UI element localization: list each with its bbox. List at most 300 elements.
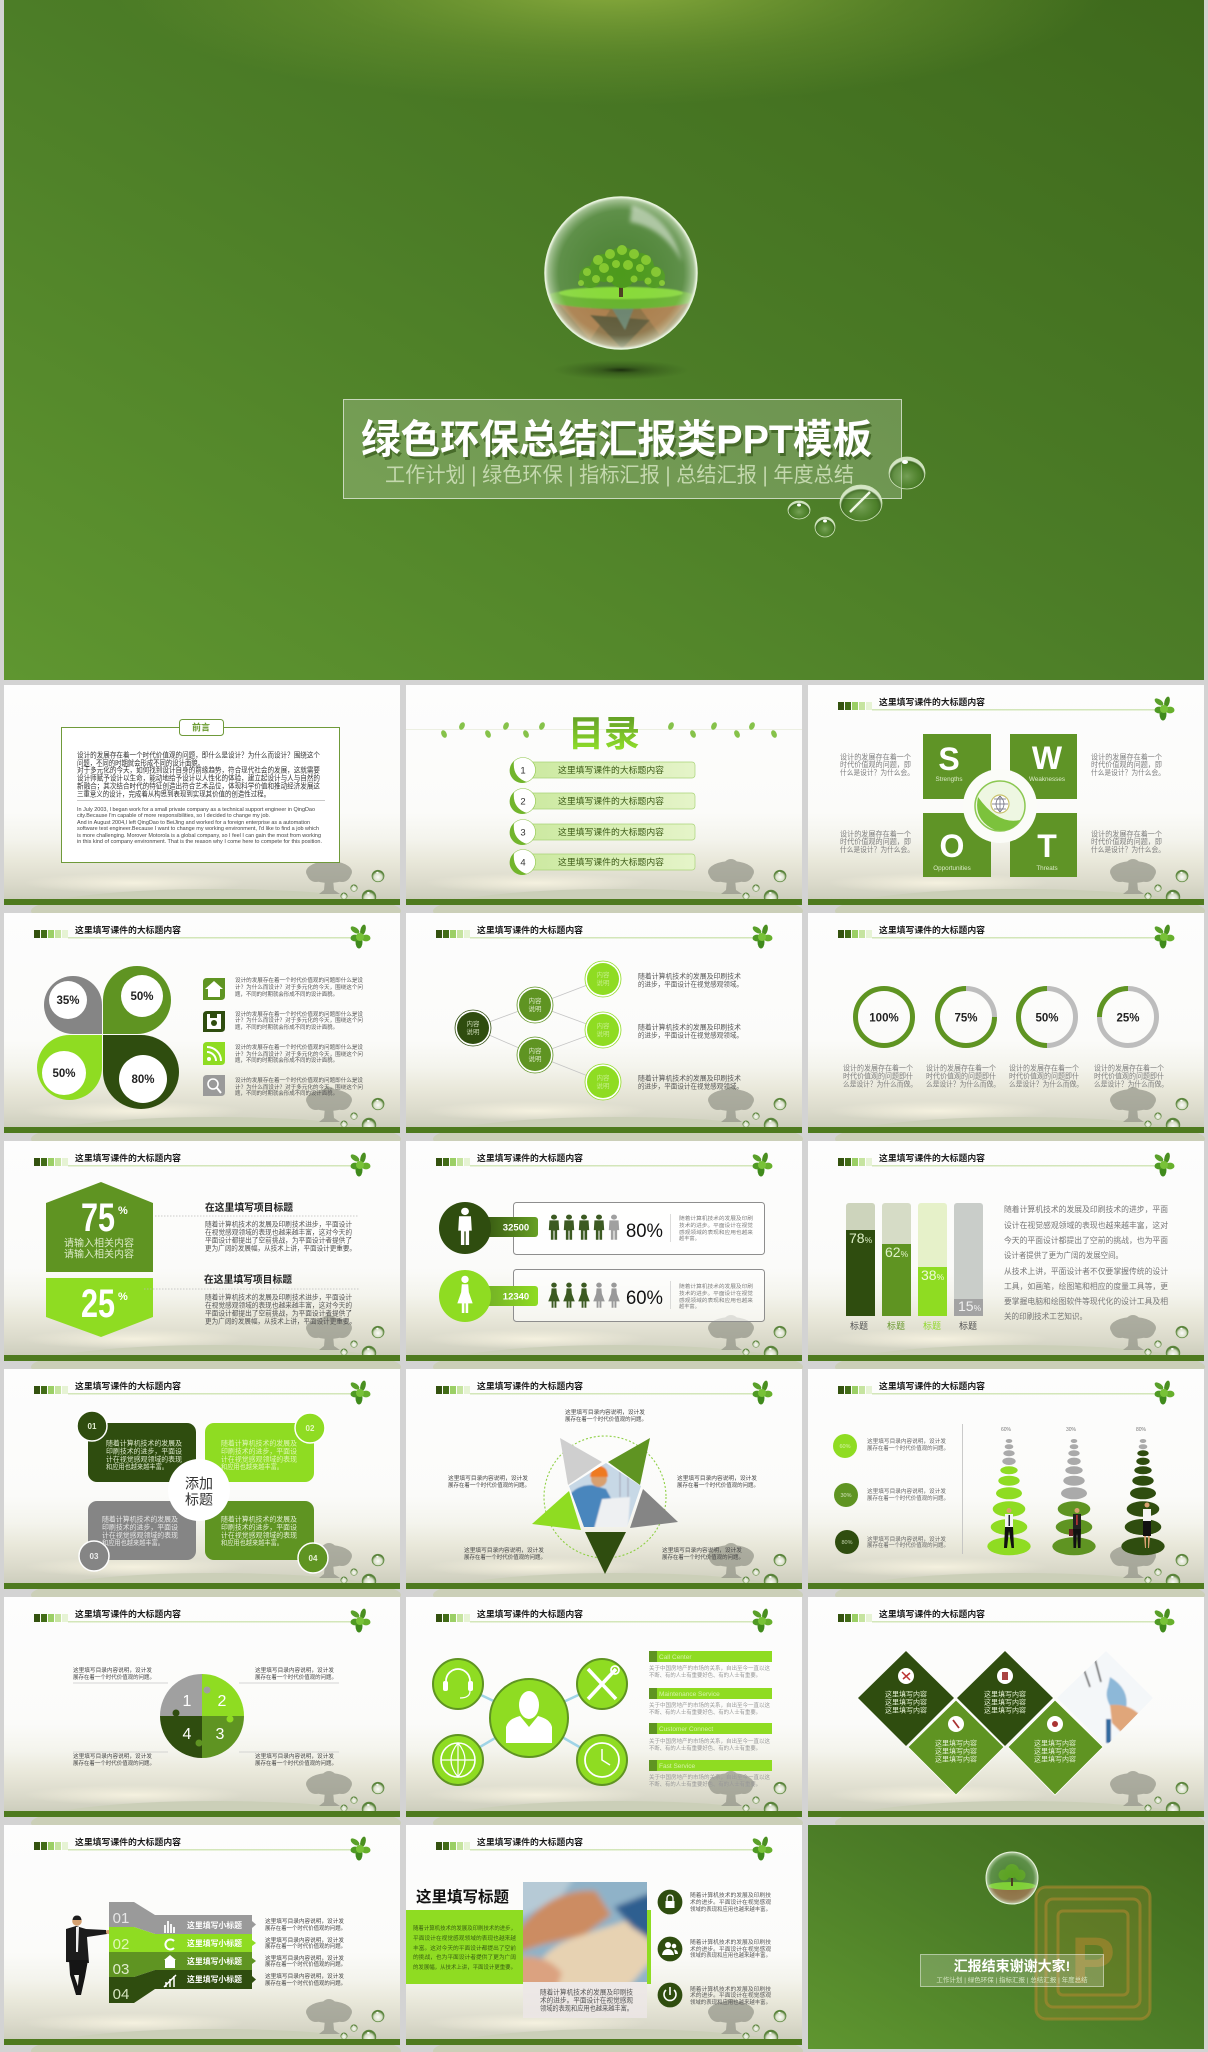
green text panel: 随着计算机技术的发展及印刷技术的进步，	[413, 1924, 516, 1932]
feature: users: 随着计算机技术的发展及印刷技	[690, 1938, 771, 1946]
text blocks: 这里填写目录内容说明，设计发	[73, 1752, 152, 1760]
text block: 随着计算机技术的发展及印刷技术的进步，平面	[1004, 1204, 1168, 1214]
node: third level: 内容	[596, 1021, 610, 1030]
service: Call Center: 关于中国房地产的市场的关系，自出至今一直以这	[649, 1664, 770, 1672]
node: third level: 说明	[596, 978, 610, 987]
heading: main title shadow: 绿色环保总结汇报类PPT模板	[363, 421, 874, 465]
section title: 这里填写标题	[416, 1887, 510, 1906]
text block: Chinese preface: 问题，不同的时期就会形成不同的设计面貌。	[77, 759, 204, 768]
puzzle chart: 4	[183, 1726, 192, 1743]
card 03: 随着计算机技术的发展及	[102, 1514, 178, 1524]
panel: slide stacked ellipses	[808, 1369, 1205, 1617]
legend: 这里填写目录内容说明，设计发	[867, 1487, 946, 1495]
item 1: 在这里填写项目标题	[205, 1201, 293, 1214]
text block: Chinese preface	[77, 751, 321, 799]
heading: 这里填写课件的大标题内容	[477, 1836, 583, 1847]
panel: slide preface	[4, 685, 401, 933]
text: SWOT notes: 什么是设计？为什么会。	[1091, 845, 1165, 854]
shadow under bubble	[553, 360, 689, 380]
ribbon menu: 03	[113, 1961, 129, 1978]
text block: English preface: And in August 2004,I left QingDao to BeiJing and worked for a foreign enterprise as a automation	[77, 820, 310, 826]
card 03: 印刷技术的进步，平面设	[102, 1522, 178, 1532]
service: Call Center	[649, 1651, 772, 1679]
SWOT squares: T	[1037, 828, 1057, 864]
diamond 4	[1008, 1700, 1103, 1795]
card 02: 02	[306, 1424, 315, 1433]
chart: four petals: 50%	[52, 1068, 76, 1080]
text block: Chinese preface: 三重意义的设计，完成着从构思到表现到实现其价值的创造性过程。	[77, 790, 270, 799]
heading: 这里填写课件的大标题内容	[75, 1836, 181, 1847]
feature: lock: 随着计算机技术的发展及印刷技	[690, 1891, 771, 1899]
chart: four petals: 35%	[56, 995, 80, 1007]
card 01	[77, 1411, 196, 1482]
heading: 这里填写课件的大标题内容	[879, 924, 985, 935]
text block: 要掌握电脑和绘图软件等现代化的设计工具及相	[1004, 1296, 1168, 1306]
card 04: 和应用也越来越丰富。	[221, 1538, 283, 1547]
text blocks	[448, 1408, 759, 1561]
text blocks: 随着计算机技术的发展及印刷技术	[638, 1074, 741, 1082]
ring chart 50%: 50%	[1035, 1012, 1059, 1024]
centre label: 标题	[185, 1492, 213, 1508]
icon: search	[203, 1075, 225, 1096]
ribbon menu: 04	[113, 1986, 129, 2003]
heading tag: preface: 前言	[192, 722, 210, 732]
feature: users: 术的进步。平面设计在视觉感观	[690, 1945, 771, 1953]
text: SWOT notes: 设计的发展存在着一个	[840, 752, 911, 762]
captions: 时代价值观的问题即什	[843, 1072, 913, 1080]
text block: English preface: In July 2003, I began work for a small private company as a technical support engineer in QingDao	[77, 807, 315, 813]
text: SWOT notes: 时代价值观的问题，即	[1091, 760, 1162, 769]
text blocks: 展存在着一个时代价值观的问题。	[448, 1481, 530, 1489]
heading: 这里填写课件的大标题内容	[477, 1152, 583, 1163]
text blocks: 这里填写目录内容说明，设计发	[265, 1954, 344, 1962]
item 2	[144, 1273, 359, 1326]
icon: disk	[203, 1011, 225, 1032]
panel: slide service icons	[406, 1597, 803, 1845]
text blocks	[235, 976, 363, 1097]
legend: 展存在着一个时代价值观的问题。	[867, 1541, 949, 1549]
text block: 从技术上讲，平面设计者不仅要掌握传统的设计	[1004, 1266, 1168, 1276]
text blocks: 展存在着一个时代价值观的问题。	[265, 1942, 346, 1950]
node: second level: 内容	[528, 996, 542, 1005]
diamond 1: 这里填写内容	[885, 1698, 927, 1706]
SWOT squares: W	[1032, 740, 1063, 776]
service: Maintenance Service: 关于中国房地产的市场的关系，自出至今一直以这	[649, 1701, 770, 1709]
card 04: 印刷技术的进步，平面设	[221, 1522, 297, 1532]
text blocks: 题，不同的时期就会形成不同的设计面貌。	[235, 1023, 338, 1031]
shape: 75 percent hexagon	[46, 1182, 153, 1272]
shape: 75 percent hexagon: %	[118, 1205, 128, 1217]
ring chart 75%	[938, 988, 994, 1046]
heading tag: preface	[180, 720, 224, 736]
text block: English preface: city.Because I'm capable of more responsibilities, so I decided to change my job.	[77, 813, 270, 819]
diamond 2: 这里填写内容	[984, 1706, 1026, 1714]
captions: 时代价值观的问题即什	[1094, 1072, 1164, 1080]
photo: hands and paper	[523, 1882, 647, 1982]
stack 60%	[987, 1427, 1031, 1555]
panel: closing slide	[808, 1825, 1204, 2049]
green text panel: 丰富。这对今天的平面设计都提出了空前	[413, 1944, 516, 1952]
text block: Chinese preface: 新融合；其次结合时代的特征创造出符合艺术品位，体现科学价值和推动经济发展这	[77, 782, 321, 791]
stack 30%	[1052, 1427, 1096, 1555]
captions: 设计的发展存在着一个	[1009, 1064, 1080, 1072]
heading: 这里填写课件的大标题内容	[879, 1380, 985, 1391]
text blocks: 计？为什么而设计？对于多元化的今天，围绕这个问	[235, 1050, 363, 1058]
panel: slide photo and feature list	[406, 1825, 803, 2052]
bar chart: 38%	[921, 1267, 945, 1283]
green text panel: 平面设计在视觉感观领域的表现也越来越	[413, 1934, 516, 1942]
stat row: male 32500	[439, 1202, 764, 1254]
stat row: male 32500: 越丰富。	[679, 1234, 700, 1242]
captions: 设计的发展存在着一个	[1094, 1064, 1165, 1072]
list item 2	[510, 788, 695, 814]
title box	[920, 1954, 1104, 1986]
legend: 展存在着一个时代价值观的问题。	[867, 1444, 949, 1452]
service: Customer Connect: 关于中国房地产的市场的关系，自出至今一直以这	[649, 1737, 770, 1745]
title box: 工作计划 | 绿色环保 | 指标汇报 | 总结汇报 | 年度总结	[936, 1975, 1088, 1984]
text blocks: 设计的发展存在着一个时代价值观的问题即什么是设	[235, 1043, 363, 1051]
text block: 设计者提供了更为广阔的发展空间。	[1004, 1250, 1123, 1260]
heading: 这里填写课件的大标题内容	[75, 1608, 181, 1619]
stat row: female 12340: 随着计算机技术的发展及印刷	[679, 1282, 753, 1290]
dashed cycle	[544, 1436, 666, 1558]
text blocks: 这里填写目录内容说明，设计发	[265, 1972, 344, 1980]
icon: centre globe	[963, 769, 1037, 843]
diamond 2	[957, 1651, 1053, 1746]
heading: 这里填写课件的大标题内容	[75, 1380, 181, 1391]
bar chart	[846, 1203, 983, 1331]
stack 80%: 80%	[1136, 1427, 1147, 1433]
ring chart 25%	[1100, 988, 1156, 1046]
stat row: female 12340	[439, 1270, 764, 1322]
heading: 这里填写课件的大标题内容	[477, 1380, 583, 1391]
diamond 3: 这里填写内容	[935, 1738, 977, 1748]
diamond 4: 这里填写内容	[1034, 1754, 1076, 1764]
text block: 今天的平面设计都提出了空前的挑战，也为平面	[1004, 1235, 1168, 1245]
heading: contents title: 目录	[568, 713, 640, 754]
figure: businessman suit	[1069, 1508, 1081, 1548]
panel: slide hexagon percentages	[4, 1141, 401, 1389]
legend: 60%	[839, 1444, 851, 1450]
text block: English preface: is more challenging. Morover Motorola is a global company, so I feel I can gain the most from working	[77, 833, 321, 839]
service: Fast Service: Fast Service	[659, 1763, 696, 1770]
heading: 这里填写课件的大标题内容	[879, 1152, 985, 1163]
icon: glass bubble with tree	[545, 197, 697, 350]
puzzle chart: 2	[218, 1693, 227, 1710]
text blocks: 展存在着一个时代价值观的问题。	[464, 1553, 546, 1561]
list item 1: 这里填写课件的大标题内容	[558, 764, 664, 775]
text frame	[62, 728, 340, 862]
ribbon menu: 这里填写小标题	[187, 1956, 242, 1966]
list item 3	[510, 820, 695, 845]
shape: 75 percent hexagon: 请输入相关内容	[64, 1236, 134, 1250]
connector lines	[473, 979, 603, 1082]
icon: globe	[433, 1735, 483, 1785]
card 01: 随着计算机技术的发展及	[106, 1438, 182, 1448]
title box	[344, 400, 902, 498]
diamond 4: 这里填写内容	[1034, 1746, 1076, 1756]
stat row: female 12340: 越丰富。	[679, 1302, 700, 1310]
text blocks	[638, 972, 743, 1090]
connectors	[458, 1684, 602, 1760]
figure: businessman	[66, 1916, 110, 1995]
list item 1	[510, 758, 695, 783]
bar chart: 标题	[850, 1320, 868, 1331]
text blocks: 题，不同的时期就会形成不同的设计面貌。	[235, 1089, 338, 1097]
green text panel: 的发展幅，从技术上讲，平面设计更重要。	[413, 1963, 516, 1971]
text block: Chinese preface: 设计的发展存在着一个时代价值观的问题，即什么是设计？为什么而设计？围绕这个	[77, 751, 321, 760]
panel: slide SWOT	[808, 685, 1205, 933]
text block: Chinese preface: 设计师赋予设计以生命，能动地给予设计以人性化的体验，建立起设计与人与自然的	[77, 774, 320, 783]
node: third level	[585, 961, 621, 1100]
text: SWOT notes	[840, 752, 1165, 854]
text: SWOT notes: 设计的发展存在着一个	[1091, 752, 1162, 762]
service: Call Center: Call Center	[659, 1654, 692, 1661]
stat row: male 32500: 80%	[626, 1221, 663, 1242]
text blocks: 这里填写目录内容说明，设计发	[565, 1408, 645, 1416]
icon: tools	[577, 1659, 627, 1709]
service: Call Center: 不断、有的人士有重要好色、有的人士有重要。	[649, 1671, 761, 1679]
text blocks: 题，不同的时期就会形成不同的设计面貌。	[235, 1056, 338, 1064]
node: root	[455, 1010, 491, 1046]
node: second level: 说明	[528, 1004, 542, 1013]
service: Fast Service: 关于中国房地产的市场的关系，自出至今一直以这	[649, 1773, 770, 1781]
heading: 这里填写课件的大标题内容	[75, 924, 181, 935]
list item 3: 3	[520, 828, 526, 838]
ring chart 100%	[856, 988, 912, 1046]
captions: 时代价值观的问题即什	[1009, 1072, 1079, 1080]
text block	[1004, 1204, 1168, 1321]
icon: home	[203, 978, 225, 1000]
text blocks: 的进步，平面设计在视觉感观领域。	[638, 1030, 743, 1040]
card 04: 计在视觉感观领域的表现	[221, 1530, 297, 1540]
card 02: 随着计算机技术的发展及	[221, 1438, 297, 1448]
legend: 展存在着一个时代价值观的问题。	[867, 1494, 949, 1502]
ring chart 50%	[1018, 988, 1076, 1046]
item 2: 平面设计都提出了空前挑战，为平面设计者提供了	[205, 1308, 352, 1318]
card 03: 和应用也越来越丰富。	[102, 1538, 164, 1547]
text: SWOT notes: 时代价值观的问题，即	[1091, 837, 1162, 846]
text block: 关的印刷技术工艺知识。	[1004, 1311, 1087, 1321]
subtitle: 工作计划 | 绿色环保 | 指标汇报 | 总结汇报 | 年度总结	[385, 464, 854, 487]
text blocks: 这里填写目录内容说明，设计发	[662, 1546, 742, 1554]
panel: slide star diagram	[406, 1369, 803, 1617]
list item 3: 这里填写课件的大标题内容	[558, 826, 664, 837]
card 02: 计在视觉感观领域的表现	[221, 1454, 297, 1464]
service: Maintenance Service	[649, 1688, 772, 1716]
text blocks: 展存在着一个时代价值观的问题。	[265, 1960, 346, 1968]
captions: 么是设计？为什么而做。	[926, 1080, 1000, 1088]
text blocks: 这里填写目录内容说明，设计发	[255, 1666, 334, 1674]
node: third level: 内容	[596, 970, 610, 979]
text blocks: 这里填写目录内容说明，设计发	[464, 1546, 544, 1554]
item 1: 平面设计都提出了空前挑战，为平面设计者提供了	[205, 1236, 352, 1244]
feature: users	[658, 1937, 771, 1961]
feature: power: 领域的表现和应用也越来越丰富。	[690, 1998, 771, 2006]
stack 30%: 30%	[1066, 1427, 1077, 1433]
text blocks: 这里填写目录内容说明，设计发	[265, 1936, 344, 1944]
text blocks: 设计的发展存在着一个时代价值观的问题即什么是设	[235, 1010, 363, 1018]
bar chart: 标题	[887, 1320, 905, 1331]
text block: 设计在视觉感观领域的表现也越来越丰富，这对	[1004, 1220, 1168, 1230]
service: Customer Connect: 不断、有的人士有重要好色、有的人士有重要。	[649, 1744, 761, 1752]
ribbon menu: 这里填写小标题	[187, 1938, 242, 1948]
panel: slide petal chart	[4, 913, 401, 1161]
text blocks: 计？为什么而设计？对于多元化的今天，围绕这个问	[235, 1083, 363, 1091]
service: Maintenance Service: 不断、有的人士有重要好色、有的人士有重要。	[649, 1708, 761, 1716]
ring chart 25%: 25%	[1116, 1012, 1140, 1024]
card 01: 印刷技术的进步，平面设	[106, 1446, 182, 1456]
diamond 2: 这里填写内容	[984, 1698, 1026, 1706]
item 1	[155, 1201, 359, 1252]
panel: slide tree diagram	[406, 913, 803, 1161]
text: SWOT notes: 设计的发展存在着一个	[1091, 830, 1162, 838]
text blocks: 题，不同的时期就会形成不同的设计面貌。	[235, 990, 338, 998]
card 01: 01	[88, 1422, 97, 1431]
caption panel	[523, 1982, 647, 2018]
text: SWOT notes: 时代价值观的问题，即	[840, 837, 911, 846]
panel: slide folded ribbon	[4, 1825, 401, 2052]
item 1: 在视觉感观领域的表现也越来越丰富，这对今天的	[205, 1228, 352, 1236]
list item 2: 2	[520, 796, 526, 808]
shape: 25 percent hexagon: 25	[81, 1282, 115, 1326]
node: second level	[517, 987, 553, 1073]
watermark	[1036, 1887, 1150, 2019]
item 2: 更为广阔的发展幅，从技术上讲，平面设计更重要。	[205, 1316, 356, 1326]
text: SWOT notes: 什么是设计？为什么会。	[1091, 768, 1165, 777]
icon: clock	[577, 1735, 627, 1785]
item 1: 更为广阔的发展幅，从技术上讲，平面设计更重要。	[205, 1244, 356, 1252]
feature: power	[658, 1983, 771, 2007]
shape: 25 percent hexagon	[46, 1278, 153, 1337]
card 04: 随着计算机技术的发展及	[221, 1514, 297, 1524]
text blocks: 展存在着一个时代价值观的问题。	[265, 1979, 346, 1987]
caption panel: 领域的表现和应用也越来越丰富。	[540, 2004, 633, 2012]
text blocks: 展存在着一个时代价值观的问题。	[662, 1553, 744, 1561]
node: root: 内容	[466, 1019, 480, 1028]
title box: 汇报结束谢谢大家!	[954, 1958, 1070, 1974]
text blocks: 展存在着一个时代价值观的问题。	[255, 1673, 337, 1681]
diamond 1: 这里填写内容	[885, 1706, 927, 1714]
service: Maintenance Service: Maintenance Service	[659, 1691, 720, 1698]
text blocks: 随着计算机技术的发展及印刷技术	[638, 972, 741, 980]
centre label: 添加	[185, 1476, 213, 1492]
shape: 75 percent hexagon: 请输入相关内容	[64, 1248, 134, 1260]
stat row: female 12340: 感观领域的表现和应用也越来	[679, 1296, 754, 1304]
icon: water drops	[788, 457, 925, 537]
text blocks: 展存在着一个时代价值观的问题。	[565, 1415, 647, 1423]
bar chart: 78%	[849, 1230, 873, 1246]
text: SWOT notes: 时代价值观的问题，即	[840, 760, 911, 769]
SWOT squares: Opportunities	[933, 865, 971, 872]
stat row: male 32500: 32500	[503, 1222, 529, 1234]
stat row: female 12340: 12340	[503, 1292, 529, 1302]
text: SWOT notes: 什么是设计？为什么会。	[840, 768, 914, 777]
puzzle chart	[160, 1674, 244, 1758]
bar chart: 标题	[923, 1320, 941, 1331]
text blocks: 这里填写目录内容说明，设计发	[73, 1666, 152, 1674]
shape: 75 percent hexagon: 75	[81, 1196, 115, 1240]
stack 60%: 60%	[1001, 1427, 1012, 1433]
text block: 工具，如画笔，绘图笔和相应的度量工具等，更	[1004, 1281, 1168, 1291]
diamond 3: 这里填写内容	[935, 1754, 977, 1764]
diamond 3: 这里填写内容	[935, 1746, 977, 1756]
figure: businesswoman	[1143, 1502, 1151, 1548]
item 2: 在视觉感观领域的表现也越来越丰富，这对今天的	[205, 1300, 352, 1310]
stat row: female 12340: 技术的进步。平面设计在视觉	[679, 1289, 753, 1297]
card 04: 04	[309, 1554, 318, 1563]
captions: 时代价值观的问题即什	[926, 1072, 996, 1080]
feature: power: 术的进步。平面设计在视觉感观	[690, 1991, 771, 1999]
ring chart 75%: 75%	[954, 1012, 978, 1024]
text blocks: 这里填写目录内容说明，设计发	[265, 1917, 344, 1925]
node: second level: 说明	[528, 1054, 542, 1063]
captions: 设计的发展存在着一个	[926, 1064, 997, 1072]
service: Fast Service: 不断、有的人士有重要好色、有的人士有重要。	[649, 1780, 761, 1788]
figure: businessman white shirt	[1004, 1508, 1014, 1548]
card 03	[79, 1501, 196, 1571]
stat row: male 32500: 随着计算机技术的发展及印刷	[679, 1214, 753, 1222]
text block: English preface: software test engineer.Because I want to change my working environment, I'd like to find a job which	[77, 826, 319, 832]
text blocks: 计？为什么而设计？对于多元化的今天，围绕这个问	[235, 983, 363, 991]
captions	[843, 1064, 1168, 1088]
text blocks: 展存在着一个时代价值观的问题。	[255, 1759, 337, 1767]
icon: person centre	[490, 1679, 568, 1757]
icon: rss	[203, 1042, 225, 1065]
legend: 80%	[841, 1540, 853, 1546]
diamond 1: 这里填写内容	[885, 1690, 927, 1698]
text blocks	[73, 1666, 337, 1767]
text block: English preface: in this kind of company environment. That is the reason why I come here to compete for this position.	[77, 839, 322, 845]
text blocks: 展存在着一个时代价值观的问题。	[73, 1759, 155, 1767]
chart: four petals: 80%	[131, 1074, 155, 1086]
text: SWOT notes: 什么是设计？为什么会。	[840, 845, 914, 854]
legend	[833, 1434, 949, 1554]
card 01: 和应用也越来越丰富。	[106, 1462, 168, 1471]
card 03: 03	[90, 1552, 99, 1561]
bar chart: 62%	[885, 1244, 909, 1260]
ribbon menu	[109, 1902, 256, 2003]
text block: English preface	[77, 807, 322, 845]
panel: slide puzzle circle	[4, 1597, 401, 1845]
puzzle chart: 3	[216, 1726, 225, 1743]
ribbon menu: 01	[113, 1910, 129, 1927]
caption panel: 随着计算机技术的发展及印刷技	[540, 1988, 633, 1996]
text blocks: 的进步，平面设计在视觉感观领域。	[638, 980, 743, 988]
photo: engineer	[569, 1463, 641, 1527]
text blocks: 这里填写目录内容说明，设计发	[677, 1474, 757, 1482]
bar chart: 标题	[959, 1320, 977, 1331]
node: second level: 内容	[528, 1046, 542, 1055]
list item 4: 这里填写课件的大标题内容	[558, 856, 664, 867]
list item 4: 4	[520, 858, 526, 868]
icon: small bubble	[986, 1852, 1038, 1905]
node: third level: 内容	[596, 1073, 610, 1082]
text blocks	[265, 1917, 346, 1987]
heading: 这里填写课件的大标题内容	[879, 696, 985, 707]
icon: headset	[433, 1659, 483, 1709]
ribbon menu: 这里填写小标题	[187, 1974, 242, 1984]
text blocks: 展存在着一个时代价值观的问题。	[677, 1481, 759, 1489]
diamond 4: 这里填写内容	[1034, 1738, 1076, 1748]
chart: four petals	[37, 966, 179, 1109]
panel: slide ring charts	[808, 913, 1205, 1161]
SWOT squares: Weaknesses	[1029, 776, 1065, 783]
text blocks: 展存在着一个时代价值观的问题。	[73, 1673, 155, 1681]
stat row: male 32500: 技术的进步。平面设计在视觉	[679, 1221, 753, 1229]
text blocks: 随着计算机技术的发展及印刷技术	[638, 1022, 741, 1032]
node: third level: 说明	[596, 1029, 610, 1038]
